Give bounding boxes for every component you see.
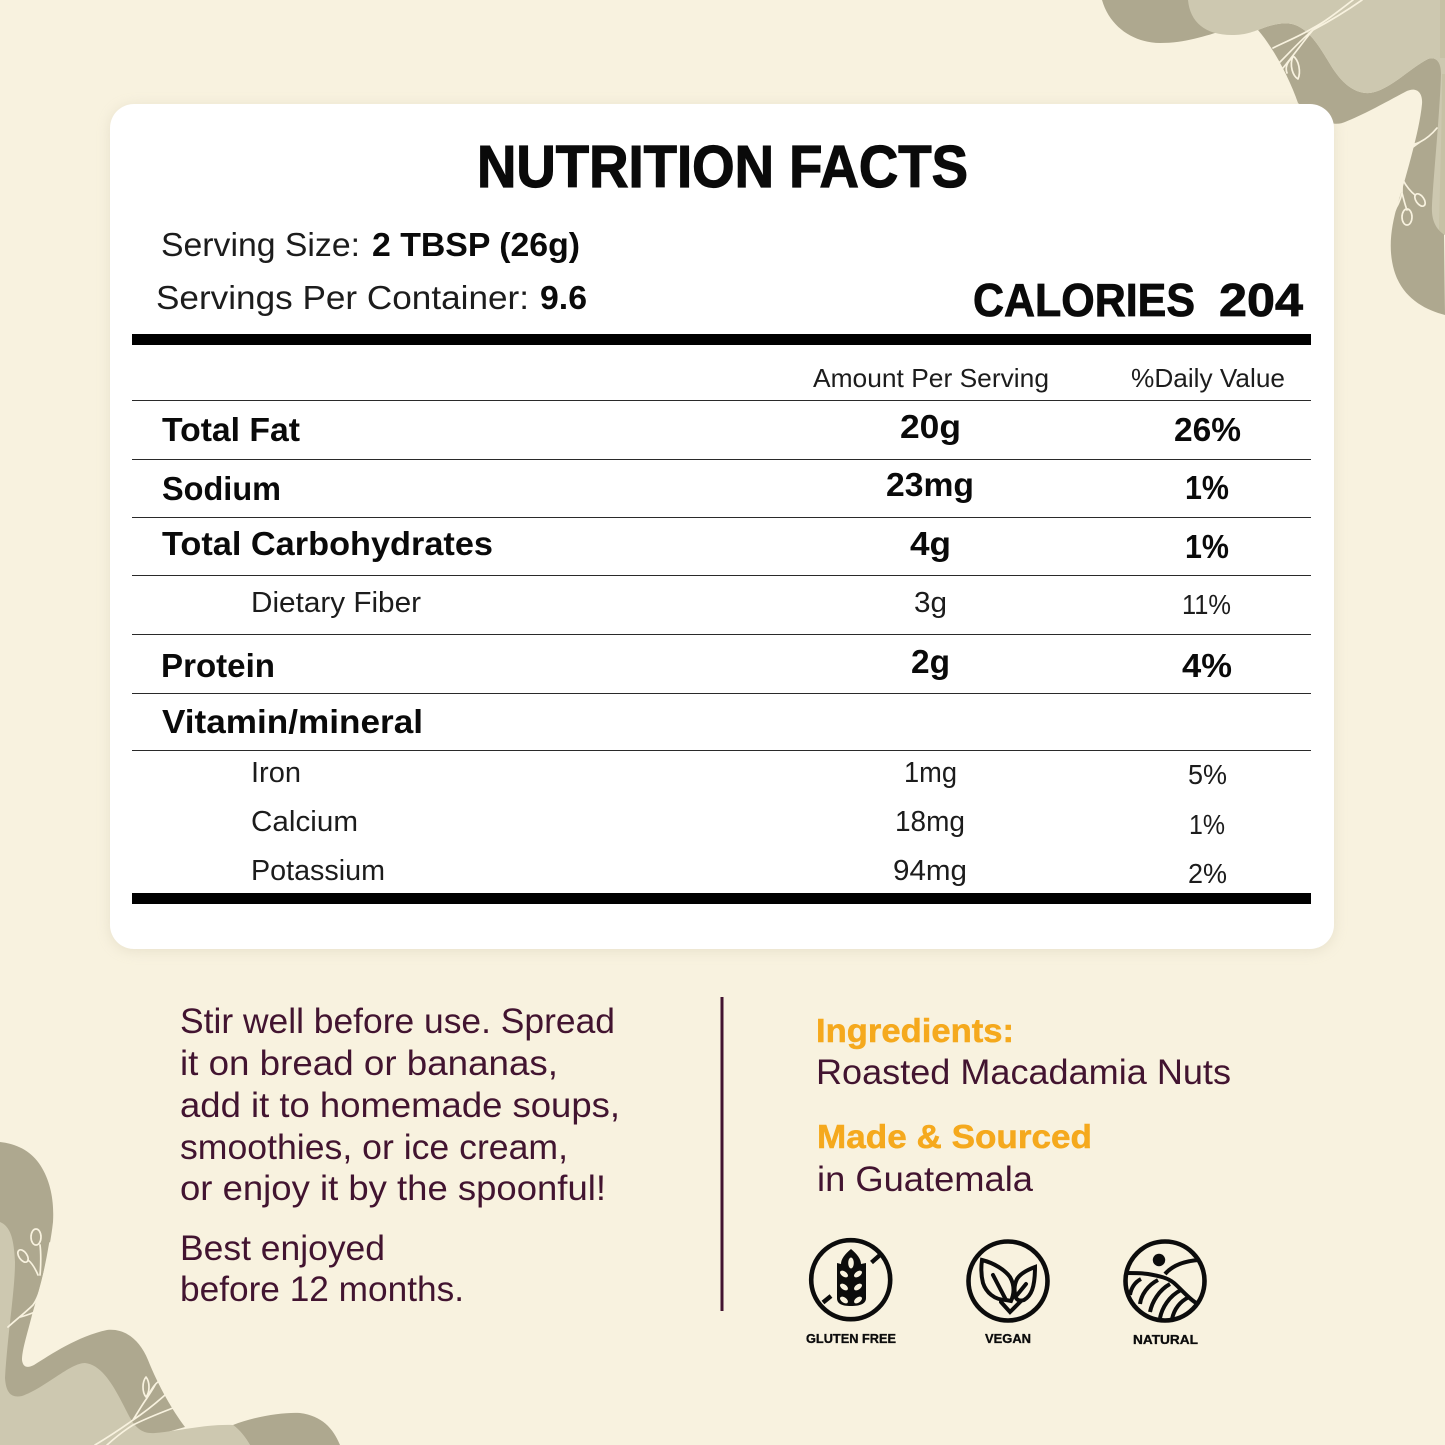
- row: potassium: 94mg: [893, 855, 967, 887]
- row: total fat: Total Fat: [162, 411, 300, 448]
- row: total fat: 26%: [1174, 411, 1241, 448]
- row: iron: 1mg: [904, 757, 957, 789]
- row: vitamin/mineral: Vitamin/mineral: [162, 703, 423, 740]
- text block: ingredients: Ingredients:: [816, 1012, 1014, 1049]
- text block: origin: [817, 1118, 1092, 1199]
- vertical divider: [720, 997, 724, 1311]
- servings per container: 9.6: [540, 279, 587, 316]
- text block: usage instructions: add it to homemade soups,: [180, 1086, 620, 1125]
- row: total carbohydrates: 4g: [910, 525, 951, 562]
- row: potassium: [251, 855, 1227, 889]
- row: sodium: [162, 466, 1229, 507]
- panel: nutrition facts card: [110, 104, 1334, 949]
- text block: shelf life: before 12 months.: [180, 1270, 464, 1309]
- row: calcium: 18mg: [895, 806, 965, 838]
- column headers: Amount Per Serving: [813, 363, 1049, 393]
- row: total carbohydrates: 1%: [1185, 528, 1229, 565]
- text block: usage instructions: [180, 1002, 620, 1208]
- row: sodium: 1%: [1185, 469, 1229, 506]
- bottom thick rule: [132, 893, 1311, 904]
- row: iron: Iron: [251, 757, 301, 789]
- decoration: top right blobs: [1102, 0, 1445, 315]
- row: protein: 2g: [911, 643, 950, 680]
- row: total carbohydrates: [162, 525, 1229, 565]
- title: NUTRITION FACTS: [477, 134, 968, 200]
- row: potassium: 2%: [1188, 858, 1227, 889]
- icon: vegan: VEGAN: [985, 1332, 1031, 1346]
- row: total carbohydrates: Total Carbohydrates: [162, 525, 493, 562]
- icon: natural: NATURAL: [1133, 1333, 1198, 1347]
- row: calcium: [251, 806, 1225, 840]
- column headers: %Daily Value: [1131, 363, 1285, 393]
- text block: usage instructions: Stir well before use. Spread: [180, 1002, 615, 1041]
- text block: origin: Made & Sourced: [817, 1118, 1092, 1155]
- row: iron: 5%: [1188, 759, 1227, 790]
- text block: usage instructions: smoothies, or ice cream,: [180, 1128, 568, 1167]
- decoration: bottom left blobs: [0, 1142, 340, 1445]
- serving size: [161, 226, 580, 263]
- row: sodium: Sodium: [162, 470, 281, 507]
- calories: CALORIES: [973, 274, 1195, 326]
- text block: shelf life: [180, 1229, 464, 1309]
- top thick rule: [132, 334, 1311, 345]
- text block: usage instructions: it on bread or bananas,: [180, 1044, 558, 1083]
- text block: ingredients: [816, 1012, 1231, 1092]
- icon: gluten free: [806, 1240, 896, 1346]
- serving size: 2 TBSP (26g): [372, 226, 580, 263]
- text block: ingredients: Roasted Macadamia Nuts: [816, 1053, 1231, 1092]
- icon: natural: [1126, 1242, 1204, 1347]
- serving size: Serving Size:: [161, 226, 360, 263]
- row: total fat: 20g: [900, 408, 961, 445]
- servings per container: Servings Per Container:: [156, 279, 529, 316]
- text block: shelf life: Best enjoyed: [180, 1229, 385, 1268]
- row: dietary fiber: 11%: [1182, 589, 1231, 620]
- row: dietary fiber: 3g: [914, 587, 947, 619]
- row: dietary fiber: [251, 587, 1231, 620]
- card shadow: [110, 106, 1334, 951]
- row: protein: Protein: [161, 647, 275, 684]
- icon: gluten free: GLUTEN FREE: [806, 1332, 896, 1346]
- row: iron: [251, 757, 1227, 790]
- column headers: [813, 363, 1285, 393]
- row: total fat: [162, 408, 1241, 448]
- row: calcium: Calcium: [251, 806, 358, 838]
- calories: 204: [1219, 274, 1303, 326]
- text block: origin: in Guatemala: [817, 1160, 1034, 1199]
- row: potassium: Potassium: [251, 855, 385, 887]
- row: protein: 4%: [1182, 647, 1232, 684]
- row: sodium: 23mg: [886, 466, 974, 503]
- row: dietary fiber: Dietary Fiber: [251, 587, 421, 619]
- row: calcium: 1%: [1189, 809, 1225, 840]
- text block: usage instructions: or enjoy it by the spoonful!: [180, 1169, 606, 1208]
- row: protein: [161, 643, 1232, 684]
- icon: vegan: [968, 1242, 1048, 1346]
